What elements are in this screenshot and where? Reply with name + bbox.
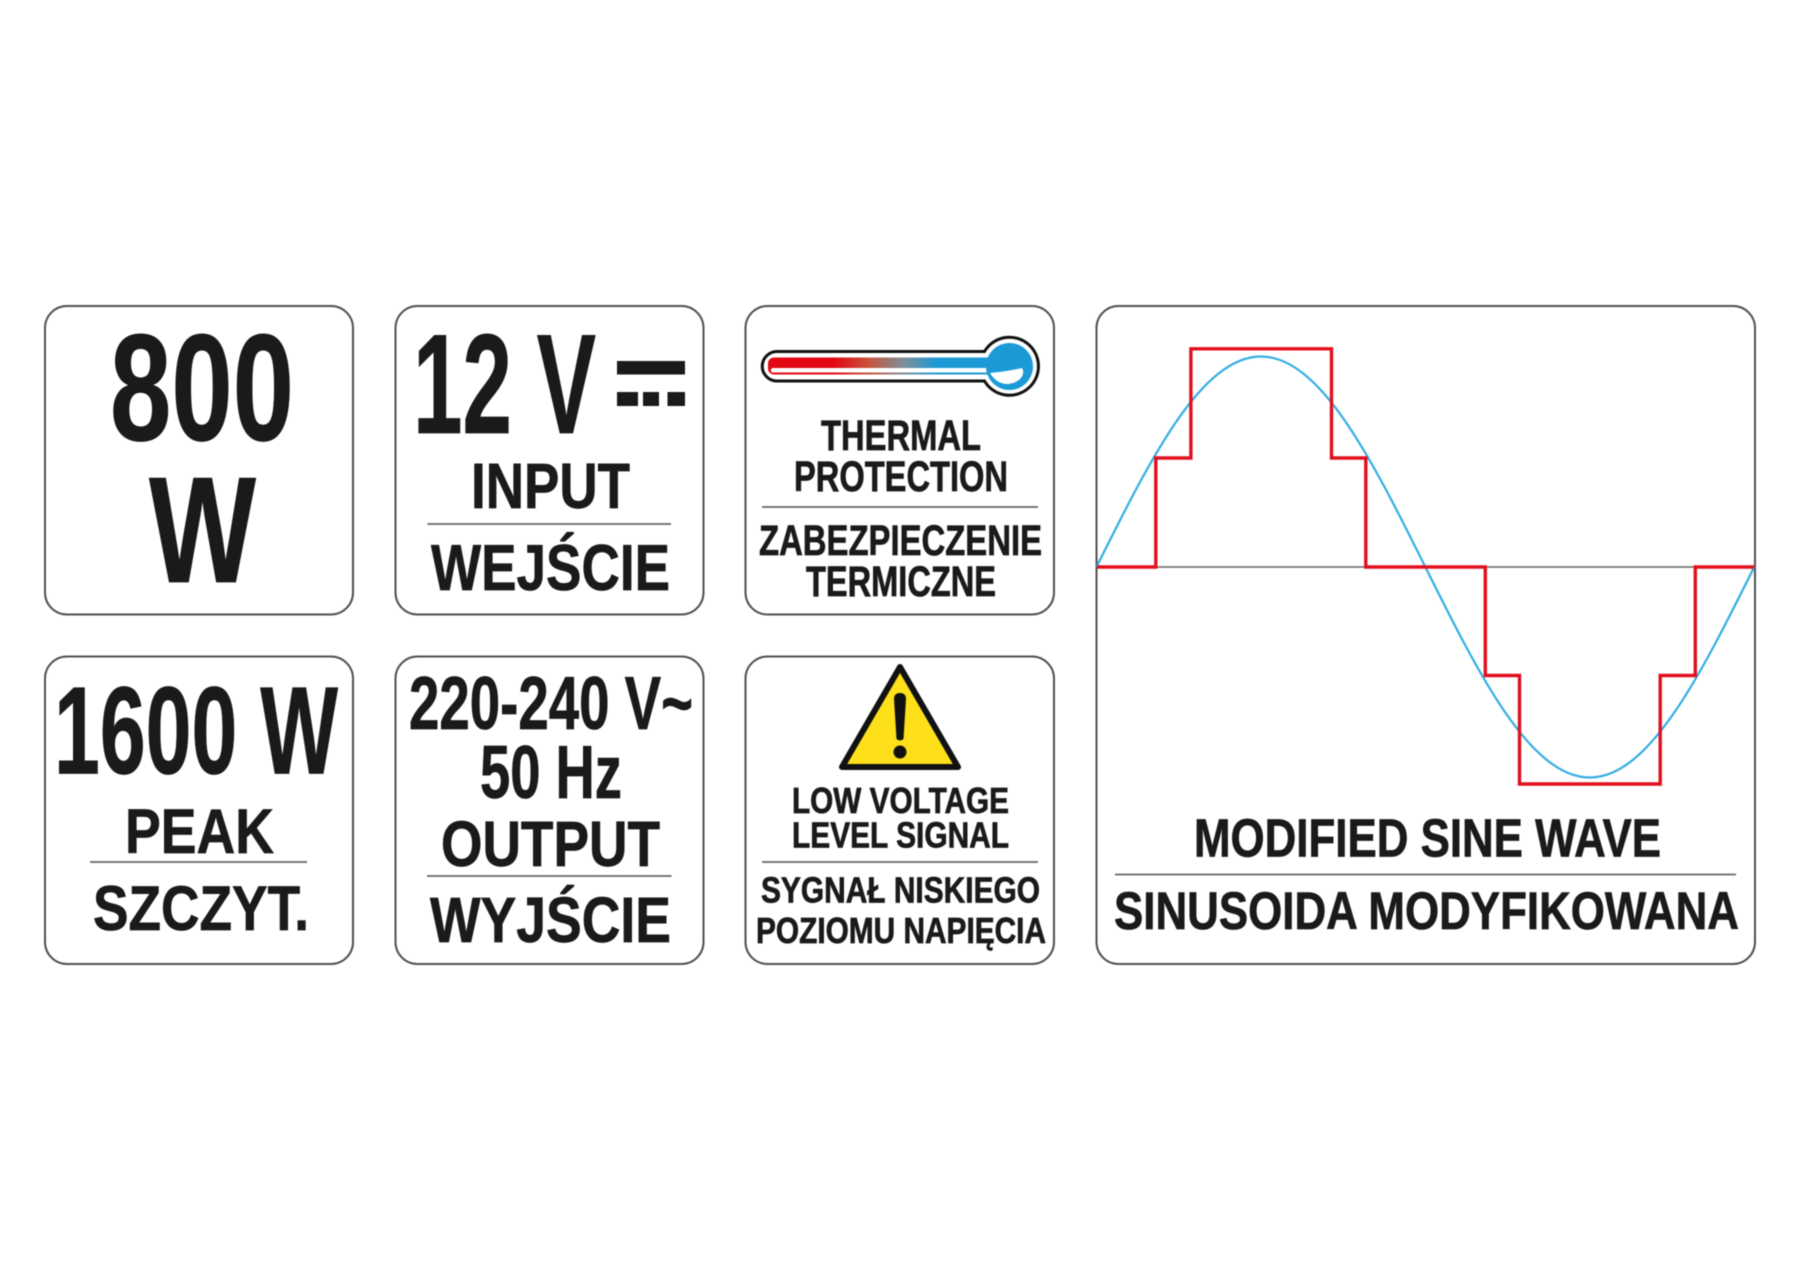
value: 800: 800 [110,303,294,473]
label: WYJŚCIE: WYJŚCIE [430,884,671,956]
label: INPUT: INPUT [471,450,630,522]
value: 12 V: 12 V [413,305,596,464]
panel: 220-240 V output [396,656,704,964]
curve: modified sine steps [1097,349,1754,784]
label: WEJŚCIE: WEJŚCIE [431,531,670,604]
value: 220-240 V~: 220-240 V~ [409,661,693,745]
value: 50 Hz: 50 Hz [480,730,622,814]
label: POZIOMU NAPIĘCIA: POZIOMU NAPIĘCIA [756,910,1046,951]
label: ZABEZPIECZENIE: ZABEZPIECZENIE [759,517,1042,565]
panel: 800 W power [45,303,353,614]
label: LEVEL SIGNAL: LEVEL SIGNAL [792,814,1009,856]
panel: 1600 W peak [45,656,353,964]
label: THERMAL: THERMAL [821,412,981,460]
panel: low voltage signal [746,656,1054,964]
panel: 12 V input [396,305,704,614]
panel: thermal protection [746,306,1054,614]
label: MODIFIED SINE WAVE: MODIFIED SINE WAVE [1194,808,1661,868]
chart: waveform [1096,349,1754,784]
label: PROTECTION: PROTECTION [794,453,1008,501]
label: PEAK: PEAK [125,797,274,867]
value: 1600 W: 1600 W [54,662,338,800]
panel: modified sine wave [1096,306,1755,964]
unit: W: W [149,445,256,614]
label: TERMICZNE: TERMICZNE [806,558,996,606]
label: SZCZYT.: SZCZYT. [93,874,309,944]
icon: direct current symbol [617,361,685,406]
label: LOW VOLTAGE: LOW VOLTAGE [792,780,1009,821]
label: OUTPUT: OUTPUT [441,808,660,880]
label: SYGNAŁ NISKIEGO: SYGNAŁ NISKIEGO [761,870,1040,910]
curve: pure sine [1096,356,1754,778]
icon: warning triangle [842,667,958,767]
icon: thermometer [762,337,1038,395]
